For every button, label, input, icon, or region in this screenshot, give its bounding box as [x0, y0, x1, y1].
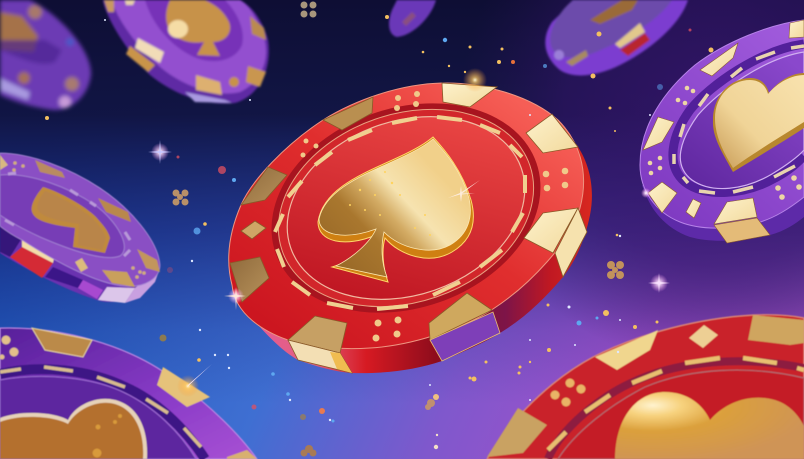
particles: gold and blue dust	[45, 15, 714, 449]
sparkle right	[648, 273, 670, 293]
chip: small blurred top center	[389, 0, 436, 37]
pips	[648, 86, 802, 200]
gold edge blocks	[230, 83, 587, 373]
pips	[0, 336, 122, 458]
chip: blurred top-left purple	[0, 0, 91, 110]
chip edge	[0, 225, 160, 303]
heart emblem	[615, 392, 804, 459]
chip: bottom-right red with heart	[487, 315, 804, 459]
chip face	[640, 20, 804, 228]
clover bottom	[300, 445, 316, 456]
sparkles: star flares	[148, 68, 670, 397]
chip: left purple with spade	[0, 153, 160, 303]
chip edge	[642, 185, 804, 241]
inner face	[0, 376, 196, 459]
confetti piece	[425, 394, 439, 410]
heart emblem	[0, 399, 147, 459]
gold blocks	[104, 0, 266, 103]
chip face	[0, 153, 160, 286]
chip: main red chip with gold spade	[229, 69, 592, 373]
spade emblem	[318, 137, 473, 282]
sparkle bottom-left chip	[177, 364, 212, 397]
clover top	[300, 2, 316, 18]
ring dashes	[674, 46, 804, 193]
chip: bottom-left purple with heart	[0, 328, 257, 459]
clover right	[607, 261, 624, 279]
inner rings	[243, 69, 569, 347]
chip: top purple with spade	[103, 0, 269, 103]
inner face	[558, 370, 804, 459]
ring dashes	[275, 117, 525, 309]
sparkle spade	[448, 180, 480, 202]
pips	[550, 378, 586, 406]
ring dashes	[0, 367, 201, 447]
spade emblem	[32, 187, 110, 253]
sparkle right chip	[641, 188, 651, 198]
pips	[12, 161, 146, 279]
sparkle chip left	[224, 287, 246, 310]
sparkle chip top	[463, 68, 487, 92]
clover confetti	[172, 2, 624, 456]
gold edge blocks	[643, 20, 804, 243]
chip face	[487, 315, 804, 459]
spade emblem	[166, 0, 230, 56]
inner face	[0, 175, 124, 258]
ring band	[673, 44, 804, 193]
chip edge	[245, 147, 592, 373]
gold edge blocks	[32, 328, 257, 459]
clover left	[172, 190, 188, 206]
chip face	[0, 328, 257, 459]
gold blocks	[0, 155, 160, 287]
chip face	[229, 83, 584, 349]
ring band	[0, 369, 205, 459]
sparkle left	[148, 140, 172, 164]
heart emblem	[713, 73, 804, 172]
inner face	[680, 52, 804, 189]
chip: blurred top-right purple	[545, 0, 688, 75]
chip: right purple with heart	[640, 20, 804, 243]
gold edge blocks	[487, 315, 804, 457]
ring dashes	[5, 173, 130, 256]
pips	[300, 91, 568, 342]
ring band	[548, 361, 804, 459]
ring dashes	[548, 358, 804, 450]
